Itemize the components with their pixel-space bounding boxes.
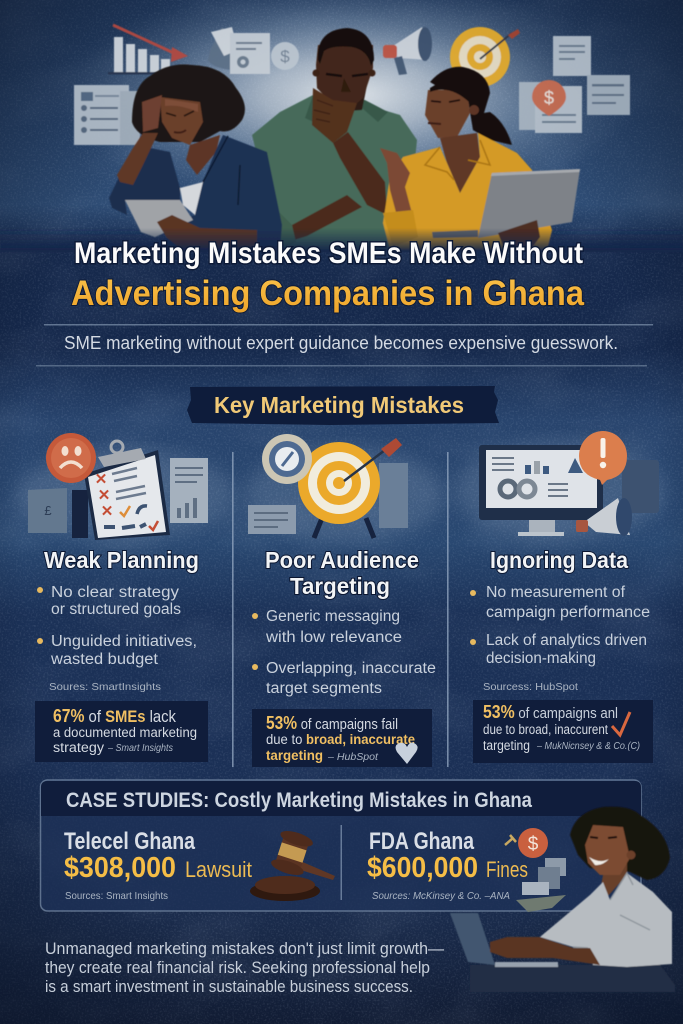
subtitle: SME marketing without expert guidance becomes expensive guesswork. — [64, 333, 618, 353]
stat callout: targeting — [266, 747, 323, 763]
stat callout: due to broad, inaccurate — [266, 731, 415, 747]
case: fda ghana — [367, 828, 528, 902]
stat callout: 67% of SMEs lack — [53, 706, 176, 726]
bullet list: No clear strategy — [51, 584, 179, 601]
bullet list: Overlapping, inaccurate — [266, 660, 436, 677]
bullet list — [37, 584, 197, 668]
heading: Targeting — [290, 573, 390, 599]
illustration: smiling woman at laptop — [450, 807, 675, 992]
icon: report sheets and dollar pin — [519, 36, 630, 133]
panel: case studies — [40, 780, 641, 912]
heading: Poor Audience — [265, 547, 419, 573]
hero background icons — [74, 25, 630, 145]
icon: clipboard with sad face: ✕ — [101, 503, 113, 520]
bullet list: campaign performance — [486, 604, 650, 621]
stat callout — [473, 700, 653, 763]
bullet list: Generic messaging — [266, 608, 400, 625]
panel: ignoring data — [470, 431, 659, 763]
section heading: key marketing mistakes — [187, 386, 499, 425]
stat callout: – HubSpot — [327, 751, 379, 763]
icon: clipboard with sad face: ✕ — [95, 471, 107, 488]
case: fda ghana: FDA Ghana — [369, 828, 475, 855]
heading — [265, 547, 419, 599]
case: fda ghana: Fines — [486, 857, 528, 882]
bullet list: target segments — [266, 680, 382, 697]
icon: megaphone — [383, 27, 432, 75]
stat callout: due to broad, inaccurent — [483, 722, 608, 737]
section heading: key marketing mistakes: Key Marketing Mistakes — [214, 392, 464, 418]
hero people — [0, 28, 683, 252]
stat callout: 53% of campaigns fail — [266, 713, 398, 733]
closing statement — [45, 939, 444, 996]
case: telecel ghana: $308,000 — [64, 852, 176, 884]
icon: monitor with alert and megaphone — [479, 431, 659, 536]
stat callout: – MukNicnsey & & Co.(C) — [536, 740, 640, 752]
closing statement: is a smart investment in sustainable business success. — [45, 977, 413, 996]
bullet list: Lack of analytics driven — [486, 632, 647, 649]
icon: clipboard with sad face: ✕ — [98, 487, 110, 504]
bullet list: with low relevance — [265, 629, 402, 646]
icon: declining bar chart — [108, 25, 188, 74]
bullet list: No measurement of — [486, 584, 626, 601]
closing statement: Unmanaged marketing mistakes don't just limit growth— — [45, 939, 444, 958]
case: fda ghana: Sources: McKinsey & Co. –ANA — [372, 890, 510, 902]
bullet list: wasted budget — [50, 651, 159, 668]
title: Marketing Mistakes SMEs Make Without — [74, 237, 583, 270]
bullet list — [470, 584, 650, 667]
case: fda ghana: $600,000 — [367, 852, 478, 884]
tablet — [125, 200, 193, 237]
icon: clipboard with sad face — [28, 433, 208, 540]
stat callout — [35, 701, 208, 762]
laptop — [432, 230, 478, 238]
case: telecel ghana: Sources: Smart Insights — [65, 890, 168, 902]
title backdrop fade — [0, 228, 683, 252]
closing statement: they create real financial risk. Seeking professional help — [45, 958, 430, 977]
bullet list: Unguided initiatives, — [51, 633, 197, 650]
icon: checklist documents — [74, 85, 140, 145]
stat callout — [252, 709, 432, 767]
icon: dollar badge and papers: $ — [528, 834, 539, 855]
bullet list — [252, 608, 436, 697]
stat callout: a documented marketing — [53, 725, 197, 740]
panel: poor audience targeting — [248, 434, 436, 767]
icon: dollar badge and papers — [505, 828, 566, 912]
source: Soures: SmartInsights — [49, 681, 161, 693]
title — [71, 237, 584, 313]
bullet list: or structured goals — [51, 601, 181, 618]
bullet list: decision-making — [486, 650, 596, 667]
heading: CASE STUDIES: Costly Marketing Mistakes in Ghana — [66, 789, 532, 812]
icon: broken heart — [396, 742, 418, 764]
source: Sourcess: HubSpot — [483, 681, 578, 693]
stat callout: targeting — [483, 738, 530, 753]
icon: documents and dollar coin: $ — [280, 47, 290, 66]
title: Advertising Companies in Ghana — [71, 274, 584, 313]
heading: Ignoring Data — [490, 547, 628, 573]
case: telecel ghana: Telecel Ghana — [64, 828, 196, 855]
icon: target with dart — [450, 27, 520, 87]
icon: report sheets and dollar pin: $ — [544, 88, 554, 108]
case: telecel ghana: Lawsuit — [185, 857, 252, 882]
raised hand — [380, 148, 413, 227]
raised arm — [117, 133, 158, 185]
icon: clipboard with sad face: £ — [44, 503, 52, 518]
crossed forearms — [333, 132, 387, 215]
heading: Weak Planning — [44, 547, 199, 573]
icon: gavel — [250, 828, 335, 901]
stat callout: strategy — [53, 740, 104, 755]
hand on chin — [312, 88, 357, 143]
panel: weak planning — [28, 433, 208, 762]
icon: check mark — [612, 712, 630, 735]
person: woman with tablet — [109, 64, 282, 248]
stat callout: 53% of campaigns anl — [483, 702, 618, 722]
case: telecel ghana — [64, 828, 252, 902]
icon: documents and dollar coin — [208, 27, 299, 74]
person: man in green shirt — [252, 28, 417, 250]
person: woman in yellow shirt with laptop — [380, 67, 580, 250]
stat callout: – Smart Insights — [107, 742, 174, 754]
icon: target with arrow and blocked badge — [248, 434, 408, 538]
